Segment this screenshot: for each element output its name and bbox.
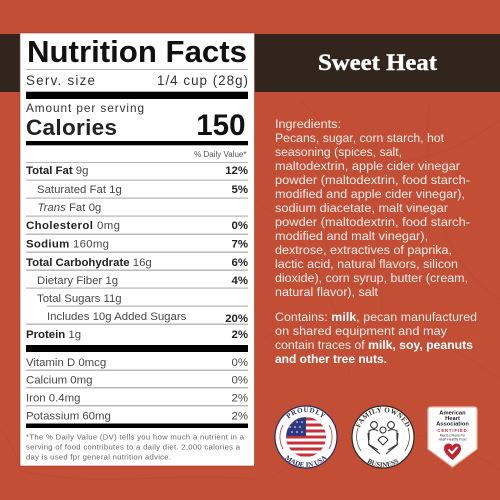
- nutrient rows: Saturated Fat 1g: [37, 184, 122, 196]
- nutrient rows: Protein 1g: [26, 329, 81, 341]
- calories: 150: [196, 109, 246, 142]
- calories: Calories: [26, 115, 117, 140]
- nutrient rows: 2%: [232, 410, 248, 422]
- badge: American Heart Association certified: American: [439, 410, 466, 416]
- badge: American Heart Association certified: Association: [436, 422, 469, 428]
- badge: American Heart Association certified: [428, 407, 477, 467]
- allergen statement: [275, 310, 477, 366]
- footnote: [26, 432, 245, 462]
- icon: family in hands: [368, 422, 398, 454]
- ingredients text: maltodextrin, apple cider vinegar: [275, 159, 460, 173]
- allergen statement: on shared equipment and may: [275, 324, 448, 338]
- ingredients text: lactic acid, natural flavors, silicon: [275, 257, 458, 271]
- ingredients text: modified and malt vinegar),: [275, 229, 428, 243]
- nutrient rows: Dietary Fiber 1g: [37, 275, 118, 287]
- allergen statement: contain traces of milk, soy, peanuts: [275, 338, 473, 352]
- nutrient rows: Total Carbohydrate 16g: [26, 257, 152, 269]
- ingredients text: [275, 117, 470, 299]
- title: Nutrition Facts: Nutrition Facts: [27, 34, 247, 69]
- nutrient rows: 0%: [232, 220, 248, 232]
- calories: [26, 109, 246, 142]
- ingredients text: powder (maltodextrin, food starch-: [275, 173, 470, 187]
- nutrient rows: Total Fat 9g: [26, 165, 88, 177]
- nutrient rows: Vitamin D 0mcg: [26, 357, 106, 369]
- badge: American Heart Association certified: Heart: [445, 416, 460, 422]
- icon: heart check: [444, 444, 461, 460]
- nutrient rows: Cholesterol 0mg: [26, 220, 120, 232]
- allergen statement: Contains: milk, pecan manufactured: [275, 310, 477, 324]
- nutrient rows: 0%: [232, 357, 248, 369]
- ingredients text: dextrose, extractives of paprika,: [275, 243, 452, 257]
- ingredients text: modified and apple cider vinegar),: [275, 187, 465, 201]
- nutrient rows: 2%: [232, 392, 248, 404]
- ingredients text: sodium diacetate, malt vinegar: [275, 201, 448, 215]
- serving size: Serv. size: [26, 73, 95, 88]
- badge: family owned business: FAMILY OWNED: [356, 407, 410, 428]
- nutrient rows: 0%: [232, 374, 248, 386]
- nutrient rows: Includes 10g Added Sugars: [47, 311, 187, 323]
- footnote: serving of food contributes to a daily diet. 2,000 calories a: [26, 442, 241, 452]
- nutrient rows: 6%: [232, 257, 248, 269]
- ingredients text: dioxide), corn syrup, butter (cream,: [275, 271, 468, 285]
- daily value header: % Daily Value*: [194, 150, 246, 159]
- heading: Sweet Heat: Sweet Heat: [318, 50, 437, 75]
- nutrient rows: Iron 0.4mg: [26, 392, 80, 404]
- nutrient rows: Potassium 60mg: [26, 410, 111, 422]
- ingredients text: Ingredients:: [275, 117, 341, 131]
- amount per serving: Amount per serving: [26, 101, 144, 115]
- nutrient rows: [26, 165, 248, 422]
- nutrient rows: 12%: [225, 165, 248, 177]
- dark header band: [0, 34, 500, 92]
- serving size: 1/4 cup (28g): [157, 73, 248, 88]
- nutrient rows: 5%: [232, 184, 248, 196]
- nutrient rows: 20%: [225, 313, 248, 325]
- badge: proudly made in USA: MADE IN USA: [284, 455, 327, 467]
- badge: family owned business: BUSINESS: [367, 458, 398, 468]
- nutrient rows: 2%: [232, 329, 248, 341]
- nutrient rows: Total Sugars 11g: [37, 293, 122, 305]
- badge: proudly made in USA: PROUDLY: [286, 407, 326, 419]
- nutrient rows: 7%: [232, 238, 248, 250]
- badge: family owned business: [351, 405, 415, 469]
- serving size: [26, 73, 248, 88]
- ingredients text: Pecans, sugar, corn starch, hot: [275, 131, 445, 145]
- nutrient rows: Calcium 0mg: [26, 374, 92, 386]
- icon: US flag: [286, 417, 326, 457]
- ingredients text: seasoning (spices, salt,: [275, 145, 402, 159]
- ingredients text: natural flavor), salt: [275, 285, 379, 299]
- footnote: day is used fpr general nutrition advice.: [26, 452, 171, 462]
- ingredients text: powder (maltodextrin, food starch-: [275, 215, 470, 229]
- badge: American Heart Association certified: Heart-Healthy Food: [439, 438, 467, 442]
- badge: proudly made in USA: [274, 405, 338, 469]
- nutrient rows: 4%: [232, 275, 248, 287]
- allergen statement: and other tree nuts.: [275, 352, 387, 366]
- footnote: *The % Daily Value (DV) tells you how much a nutrient in a: [26, 432, 245, 442]
- panel: nutrition facts: [20, 33, 254, 466]
- nutrient rows: Trans Fat 0g: [38, 202, 101, 214]
- badge: American Heart Association certified: CERTIFIED: [437, 428, 468, 433]
- nutrient rows: Sodium 160mg: [26, 238, 109, 250]
- badge: American Heart Association certified: Meets Criteria For: [440, 434, 466, 438]
